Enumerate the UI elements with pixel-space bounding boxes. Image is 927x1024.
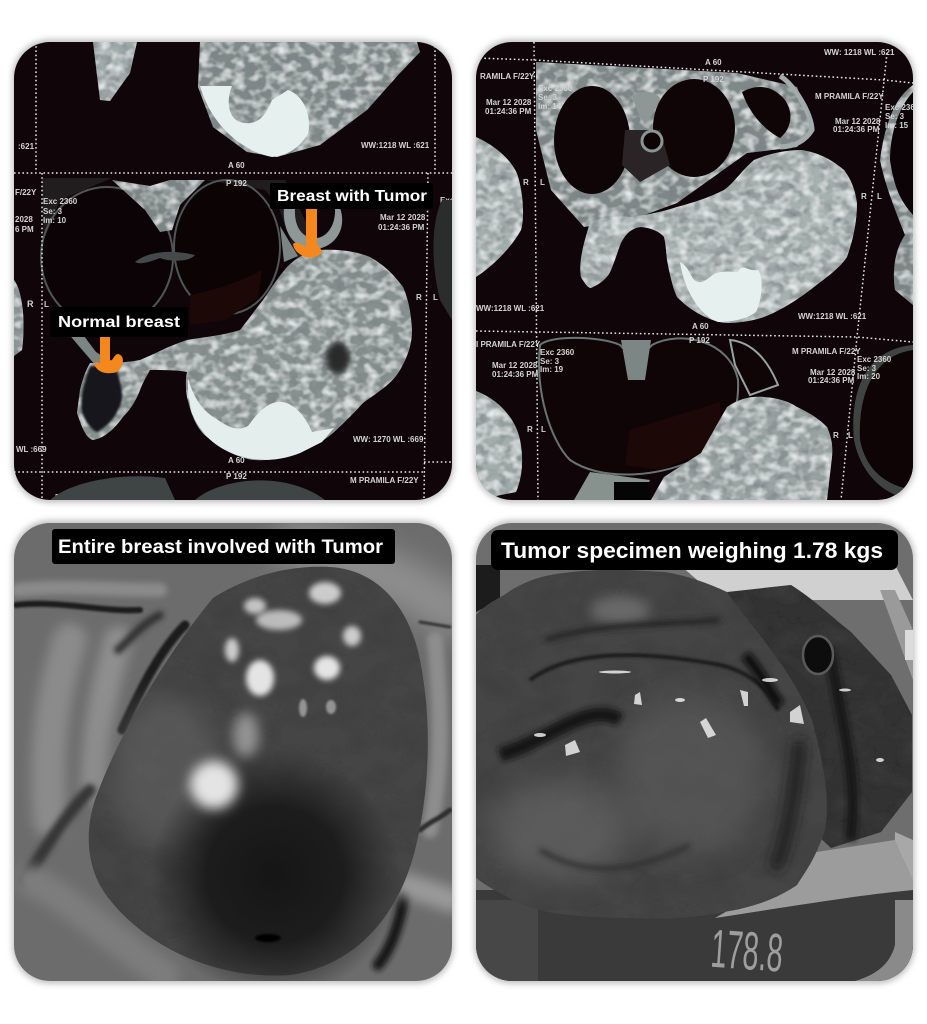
MRI overlay labels: 01:24:36 PM (833, 125, 880, 134)
MRI overlay labels: R (27, 299, 34, 309)
upper scan tissue (93, 42, 420, 157)
MRI overlay labels: Se: 3 (540, 357, 560, 366)
MRI overlay labels: P 192 (226, 179, 247, 188)
MRI overlay labels: Mar 12 2028 (486, 98, 532, 107)
wet highlights (534, 670, 884, 762)
MRI overlay labels: Se: 3 (43, 207, 63, 216)
MRI overlay labels: WW: 1218 WL :621 (824, 48, 895, 57)
MRI overlay labels (15, 141, 455, 502)
MRI overlay labels: Se: 3 (885, 112, 905, 121)
MRI overlay labels: Se: (440, 206, 452, 215)
MRI overlay labels: L (433, 293, 438, 302)
MRI overlay labels: R (416, 293, 422, 302)
MRI overlay labels: Se: 3 (538, 93, 558, 102)
panel: photo of tumor on patient (14, 523, 452, 1000)
chest body (536, 62, 812, 227)
MRI overlay labels: Exc 236 (885, 103, 915, 112)
specimen side lobe (727, 585, 912, 848)
arrow: to breast with tumor (293, 209, 322, 258)
MRI overlay labels: WW:1218 WL :621 (798, 312, 867, 321)
MRI overlay labels: WW: 1270 WL :669 (353, 435, 424, 444)
arrow: to normal breast (94, 337, 123, 373)
MRI overlay labels: M PRAMILA F/22Y (792, 347, 861, 356)
MRI overlay labels: Exc 2360 (857, 355, 892, 364)
MRI overlay labels: Exc 2360 (43, 197, 78, 206)
dotted frame lines (476, 42, 913, 500)
MRI overlay labels: 01:24:36 PM (378, 223, 425, 232)
MRI overlay labels: A 60 (228, 456, 245, 465)
panel: MRI scan series (476, 42, 915, 502)
MRI overlay labels: M PRAMILA F/22Y (815, 92, 884, 101)
caption: Breast with Tumor: Breast with Tumor (277, 188, 427, 205)
lower chest and lungs (539, 338, 778, 474)
MRI overlay labels: A 60 (692, 322, 709, 331)
dotted frame lines (14, 42, 452, 500)
breast skin rim (780, 76, 812, 147)
cystic bright area (188, 378, 334, 460)
nipple region (255, 934, 281, 942)
MRI overlay labels: Exc 2360 (55, 493, 90, 502)
panel: MRI scan with annotations (14, 42, 455, 502)
MRI overlay labels: F/22Y (15, 188, 37, 197)
MRI overlay labels: Se: 3 (857, 364, 877, 373)
MRI overlay labels: Im: 20 (857, 372, 881, 381)
lighter left flank (110, 695, 220, 845)
backdrop (476, 565, 913, 880)
dark lower shading (162, 762, 388, 981)
MRI overlay labels: Im: (440, 215, 452, 224)
MRI overlay labels: P 192 (689, 336, 710, 345)
skin glare patches (190, 582, 361, 809)
left neighbouring scan (476, 137, 523, 277)
trachea ring (642, 131, 662, 151)
main mass (580, 150, 857, 323)
MRI overlay labels: R (523, 178, 529, 187)
MRI overlay labels: Im: 10 (43, 216, 67, 225)
MRI overlay labels: Exc 2360 (540, 348, 575, 357)
MRI overlay labels: R (527, 425, 533, 434)
MRI overlay labels: A 60 (705, 58, 722, 67)
MRI overlay labels: Mar 12 2028 (835, 117, 881, 126)
towel under specimen (715, 840, 913, 918)
MRI overlay labels: :621 (18, 142, 35, 151)
MRI overlay labels: 6 PM (15, 225, 34, 234)
MRI overlay labels: 01:24:36 PM (485, 107, 532, 116)
edge tissue fragments (14, 200, 452, 500)
MRI overlay labels: L (541, 425, 546, 434)
MRI overlay labels: M PRAMILA F/22Y (350, 476, 419, 485)
MRI overlay labels: Exc (440, 196, 455, 205)
normal breast dark interior (81, 366, 122, 432)
lower mass (651, 397, 832, 500)
specimen shading (490, 596, 853, 880)
MRI overlay labels: L (848, 431, 853, 440)
MRI overlay labels: 01:24:36 PM (808, 376, 855, 385)
caption: Entire breast involved with Tumor: Entire breast involved with Tumor (58, 537, 384, 558)
drape folds (16, 545, 450, 975)
lungs (554, 79, 790, 194)
MRI overlay labels: RAMILA F/22Y (480, 72, 535, 81)
MRI overlay labels: WL :669 (16, 445, 47, 454)
specimen main mass (476, 570, 827, 919)
MRI overlay labels: Mar 12 2028 (810, 368, 856, 377)
MRI overlay labels: Mar 12 2028 (380, 213, 426, 222)
panel: excised specimen on scale (476, 523, 913, 990)
MRI overlay labels: Mar 12 2028 (492, 361, 538, 370)
caption: Breast with Tumor (270, 183, 433, 209)
tumor side skin loop (280, 208, 342, 262)
lesion dark spot (326, 342, 350, 374)
MRI overlay labels: WW:1218 WL :621 (476, 304, 545, 313)
MRI overlay labels: Im: 15 (885, 121, 909, 130)
caption: Normal breast: Normal breast (58, 314, 180, 331)
MRI overlay labels: L (877, 192, 882, 201)
MRI overlay labels: R (861, 192, 867, 201)
ducts (803, 636, 833, 674)
right neighbouring scan (880, 85, 913, 305)
bright cystic area (680, 262, 762, 322)
MRI overlay labels: 2028 (15, 215, 33, 224)
scale reading: 178.8 (709, 919, 785, 984)
MRI overlay labels: L (540, 178, 545, 187)
scale base (476, 890, 913, 990)
MRI overlay labels: P 192 (226, 472, 247, 481)
MRI overlay labels: Im: 19 (540, 365, 564, 374)
main mass: breast tumor (77, 250, 412, 460)
MRI overlay labels (476, 48, 915, 440)
MRI overlay labels: R (833, 431, 839, 440)
caption: Tumor specimen weighing 1.78 kgs (491, 530, 898, 570)
tumor mass (89, 567, 428, 976)
chest wall and lungs (41, 178, 320, 366)
MRI overlay labels: P 192 (703, 75, 724, 84)
caption: Entire breast involved with Tumor (52, 529, 395, 564)
MRI overlay labels: 01:24:36 PM (492, 370, 539, 379)
caption: Tumor specimen weighing 1.78 kgs: Tumor specimen weighing 1.78 kgs (501, 538, 883, 563)
MRI overlay labels: Exc 2360 (538, 84, 573, 93)
caption: Normal breast (50, 307, 188, 337)
MRI overlay labels: Im: 14 (538, 102, 562, 111)
MRI overlay labels: WW:1218 WL :621 (361, 141, 430, 150)
MRI overlay labels: A 60 (228, 161, 245, 170)
spine (632, 92, 660, 124)
MRI overlay labels: L (44, 300, 49, 309)
MRI overlay labels: I PRAMILA F/22Y (476, 340, 541, 349)
